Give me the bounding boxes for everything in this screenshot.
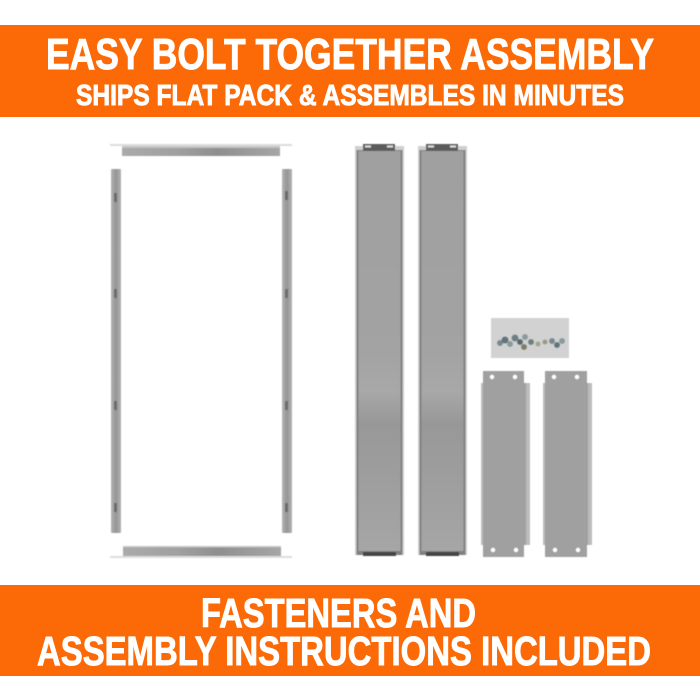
left upright rail	[111, 169, 121, 533]
short panel 1	[481, 371, 530, 557]
top banner background	[0, 25, 700, 117]
bottom banner	[0, 585, 700, 676]
long channel panels	[355, 144, 467, 556]
fastener bag	[491, 318, 569, 358]
long panel 1	[355, 144, 404, 556]
fasteners	[497, 334, 565, 350]
plastic bag	[491, 318, 569, 358]
short panel 2	[543, 371, 592, 557]
short bracket panels	[481, 371, 592, 557]
long panel 2	[418, 144, 467, 556]
bottom banner background	[0, 585, 700, 676]
top banner	[0, 25, 700, 117]
top frame rail	[110, 144, 292, 156]
frame rails	[110, 144, 292, 558]
right upright rail	[282, 169, 292, 533]
bottom text line 1: FASTENERS AND	[201, 590, 476, 636]
bottom frame rail	[110, 546, 292, 558]
